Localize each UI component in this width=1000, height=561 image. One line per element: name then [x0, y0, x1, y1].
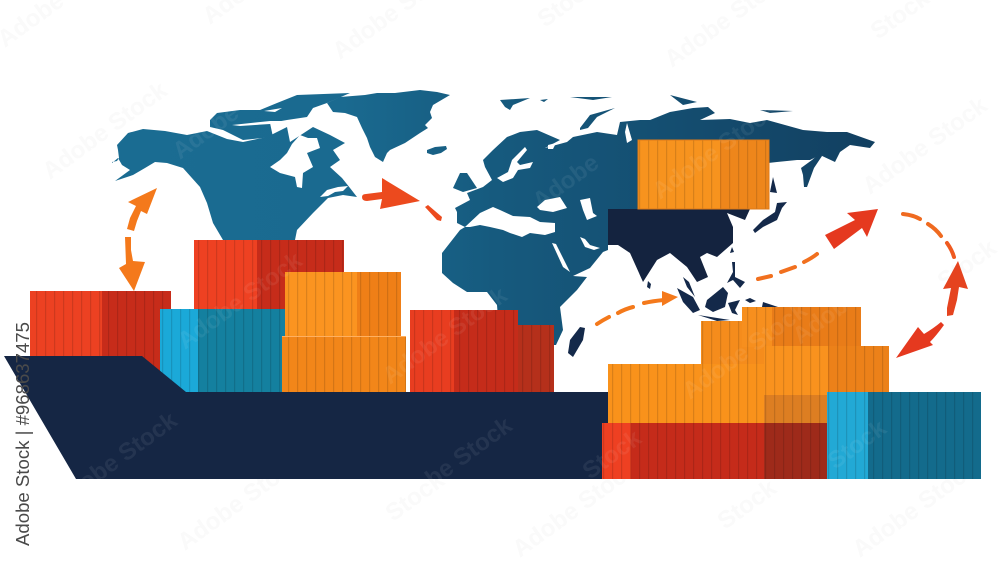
map: North America	[112, 127, 357, 240]
Arctic coast bays	[548, 123, 632, 149]
map: Svalbard and arctic isles	[500, 95, 793, 113]
map: white inland seas and lakes	[232, 108, 632, 272]
map: Kamchatka	[801, 153, 822, 187]
Sakhalin	[770, 177, 777, 193]
Sri Lanka	[647, 281, 651, 289]
left stack of containers	[30, 240, 554, 393]
New Guinea	[745, 298, 778, 307]
background watermarks: Stock	[933, 234, 1000, 295]
Sulawesi	[728, 300, 740, 315]
arrow: Indian Ocean dashed orange	[597, 291, 678, 324]
orange container: middle	[764, 346, 889, 424]
Madagascar	[568, 327, 585, 357]
background watermarks: Adobe Stock	[173, 447, 308, 556]
Borneo	[705, 287, 728, 312]
background watermarks: Stock	[713, 474, 782, 535]
Hudson Bay	[270, 135, 320, 188]
background watermarks: Adobe Stock	[508, 454, 643, 561]
map: Greenland	[327, 90, 450, 162]
arrow: right looping red	[896, 214, 968, 358]
Taiwan	[730, 247, 734, 253]
map: Great Britain and Ireland	[453, 173, 477, 192]
Baltic Sea	[497, 147, 533, 182]
foreground watermarks: Adobe Stock	[383, 411, 518, 520]
map: Novaya Zemlya	[580, 108, 615, 130]
arrow: left double-headed orange	[119, 188, 157, 291]
foreground watermarks: Adobe Stock	[378, 281, 513, 390]
arrow: Atlantic red	[362, 178, 442, 221]
background watermarks: Adobe Stock	[848, 454, 983, 561]
Japan	[753, 202, 787, 233]
orange container on the map	[638, 140, 769, 209]
orange container: top	[742, 307, 861, 347]
Red Sea	[552, 243, 570, 272]
orange container: lower	[282, 336, 406, 393]
Caspian Sea	[580, 198, 597, 220]
orange container: upper	[285, 272, 401, 338]
foreground watermarks: Adobe Stock	[173, 246, 308, 355]
foreground watermarks: Stock	[578, 424, 647, 485]
foreground watermarks: Adobe	[528, 149, 604, 215]
red container: centre	[410, 310, 554, 393]
Gulf of St Lawrence	[320, 186, 348, 197]
background watermarks: Adobe Stock	[38, 76, 173, 185]
Philippines	[727, 262, 745, 288]
orange container: front	[608, 364, 764, 424]
map: Iceland	[427, 146, 447, 155]
Mediterranean	[465, 207, 555, 237]
foreground watermarks: Adobe Stock	[788, 241, 923, 350]
red container: base	[602, 423, 827, 479]
foreground watermarks	[48, 56, 923, 520]
Black Sea	[537, 197, 567, 212]
foreground watermarks: Adobe Stock	[48, 406, 183, 515]
red container: top	[194, 240, 344, 312]
background watermarks: Stock	[381, 466, 450, 527]
foreground watermarks: Stock	[823, 414, 892, 475]
foreground watermarks: Adobe Stock	[168, 56, 303, 165]
Sumatra	[677, 288, 700, 313]
foreground watermarks: Adobe Stock	[648, 96, 783, 205]
map: Arctic islands	[210, 93, 350, 140]
Asia highlighted in navy	[608, 209, 750, 282]
right stack of containers	[602, 307, 981, 479]
ship hull	[4, 356, 608, 479]
Persian Gulf	[580, 237, 600, 250]
background watermarks: Adobe Stock	[858, 91, 993, 200]
Southeast Asia islands and Japan	[568, 177, 787, 357]
arrow: Pacific dashed to red head	[758, 209, 878, 279]
Arctic channels	[232, 108, 306, 130]
blue container: base	[827, 392, 981, 479]
world map	[112, 90, 875, 345]
vertical stock credit: Adobe Stock | #968637475	[13, 322, 33, 546]
map: Eurasia and Africa	[442, 107, 875, 345]
Java	[698, 315, 730, 321]
blue container	[160, 309, 287, 393]
red container: left	[30, 291, 171, 391]
Malay Peninsula	[683, 277, 695, 297]
orange container: back left	[701, 321, 773, 365]
foreground watermarks: Adobe Stock	[678, 296, 813, 405]
